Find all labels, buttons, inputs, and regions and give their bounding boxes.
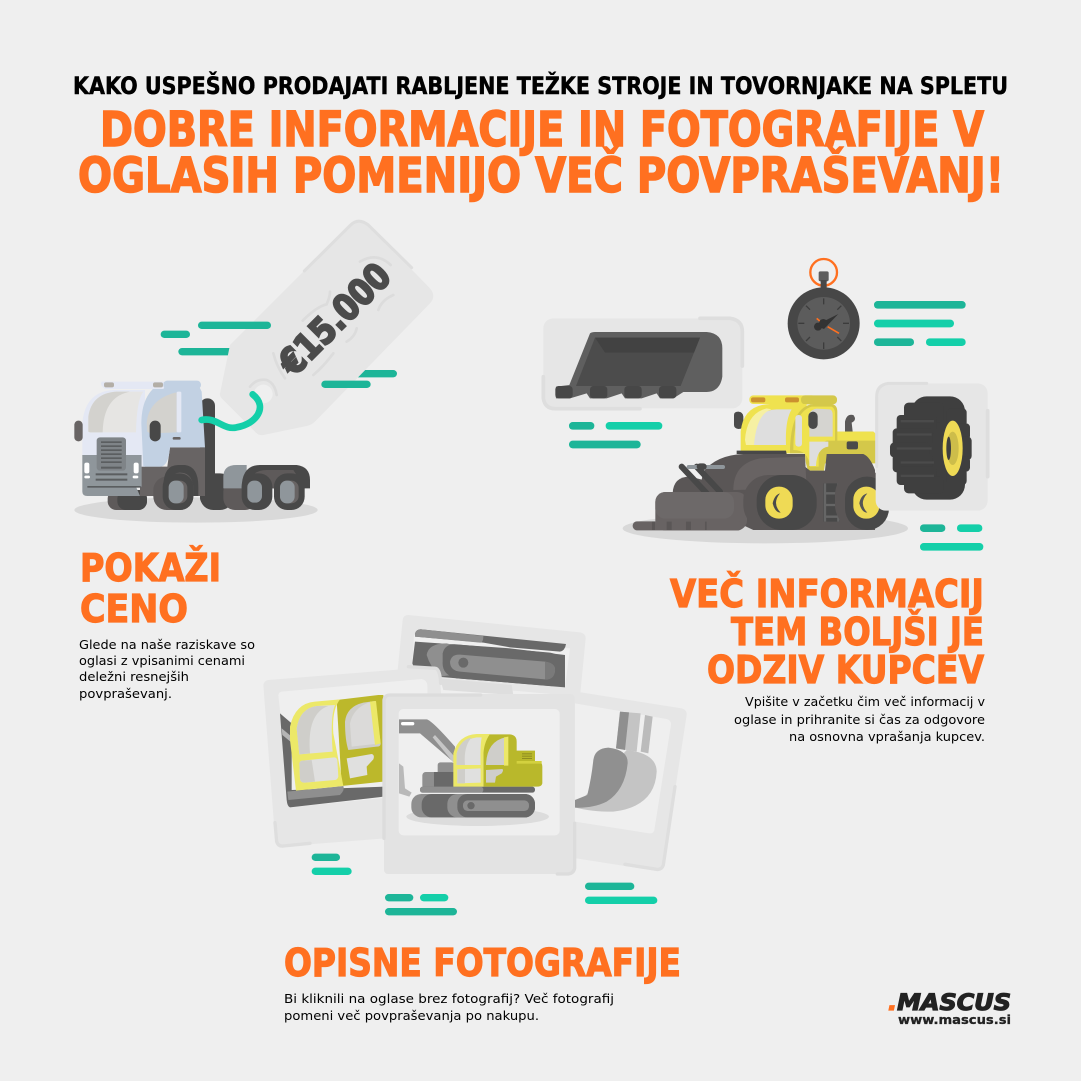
text: information: Vpišite v začetku čim več informacij v bbox=[745, 694, 986, 709]
text: price: Glede na naše raziskave so bbox=[79, 637, 255, 652]
ground shadow bbox=[623, 513, 908, 543]
rear wheels and fender bbox=[223, 465, 310, 510]
speed lines behind tag bbox=[161, 331, 397, 377]
text: information: oglase in prihranite si čas za odgovore bbox=[734, 712, 985, 727]
tire speed lines bbox=[920, 524, 983, 551]
text: photos bbox=[284, 991, 614, 1023]
text: price: deležni resnejših bbox=[79, 669, 189, 684]
illustration: truck with price tag bbox=[74, 221, 433, 523]
heading: več informacij bbox=[670, 572, 985, 692]
title bbox=[73, 70, 1008, 204]
speed lines over tag bbox=[198, 322, 371, 388]
text: information: na osnovna vprašanja kupcev. bbox=[789, 729, 985, 744]
heading: pokaži ceno: CENO bbox=[80, 587, 188, 631]
heading: opisne fotografije: OPISNE FOTOGRAFIJE bbox=[284, 941, 681, 985]
illustration: photos of excavator bbox=[263, 615, 687, 915]
speed lines bbox=[312, 854, 657, 915]
front loader arms bbox=[673, 463, 730, 497]
text: price: oglasi z vpisanimi cenami bbox=[79, 653, 245, 668]
heading: več informacij: TEM BOLJŠI JE bbox=[731, 610, 984, 654]
tire card bbox=[876, 383, 988, 511]
bucket card bbox=[543, 318, 742, 409]
rope bbox=[202, 394, 260, 428]
text: price: povpraševanj. bbox=[79, 686, 172, 701]
text: information bbox=[734, 694, 986, 744]
loader blade bbox=[633, 492, 747, 530]
logo: mascus: www.mascus.si bbox=[898, 1013, 1011, 1027]
text: photos: pomeni več povpraševanja po nakupu. bbox=[284, 1008, 539, 1023]
excavator bbox=[399, 719, 542, 817]
heading: več informacij: ODZIV KUPCEV bbox=[707, 648, 985, 692]
price text: €15.000 bbox=[271, 256, 399, 384]
photo: excavator (front) bbox=[384, 694, 575, 874]
text: price bbox=[79, 637, 255, 701]
price tag bbox=[220, 221, 433, 435]
text: photos: Bi kliknili na oglase brez fotografij? Več fotografij bbox=[284, 991, 614, 1006]
photo: track bbox=[397, 615, 586, 697]
loader bbox=[633, 395, 889, 530]
heading: pokaži ceno bbox=[80, 546, 221, 631]
logo: mascus bbox=[888, 991, 1011, 1027]
heading: pokaži ceno: POKAŽI bbox=[80, 546, 221, 590]
illustration: wheel loader with details bbox=[543, 259, 988, 551]
loader wheels bbox=[743, 470, 889, 530]
bucket speed lines bbox=[569, 422, 662, 448]
ground shadow bbox=[74, 497, 318, 523]
front wheel bbox=[153, 465, 198, 510]
photo: bucket bbox=[570, 691, 687, 871]
logo: mascus: .MASCUS bbox=[888, 991, 1011, 1016]
stopwatch speed lines bbox=[874, 301, 966, 346]
photo: cab bbox=[263, 667, 450, 847]
truck bbox=[74, 381, 310, 510]
ground shadow bbox=[406, 807, 549, 826]
heading: več informacij: VEČ INFORMACIJ bbox=[670, 572, 984, 616]
icon: stopwatch bbox=[788, 259, 860, 359]
